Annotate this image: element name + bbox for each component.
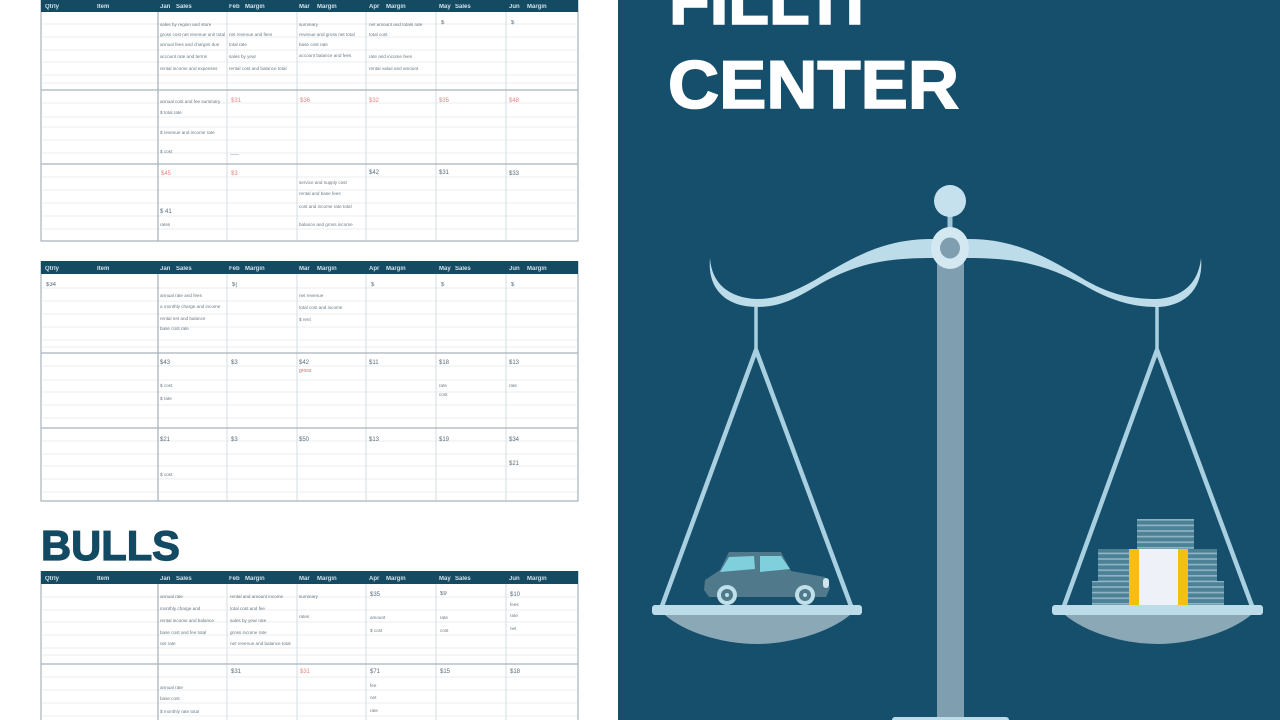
table cell text: annual rate xyxy=(160,594,183,599)
table: bottom sales grid xyxy=(41,571,578,720)
right pan xyxy=(1052,307,1263,644)
table cell text: rental net and balance xyxy=(160,316,206,321)
table cell text: $ total rate xyxy=(160,110,182,115)
table cell text: $31 xyxy=(439,170,450,176)
table header: May xyxy=(439,266,451,272)
table cell text: $36 xyxy=(300,98,311,104)
table cell text: total cost and income xyxy=(299,305,343,310)
table header: Sales xyxy=(455,4,471,10)
table cell text: monthly charge and xyxy=(160,606,201,611)
table cell text: sales by year xyxy=(229,54,257,59)
table cell text: total rate xyxy=(229,42,247,47)
table header: Qtrly xyxy=(45,4,60,10)
table cell text: $15 xyxy=(440,669,451,675)
table cell text: —— xyxy=(230,152,240,157)
table header: Margin xyxy=(527,4,547,10)
table cell text: $3 xyxy=(231,437,238,443)
table cell text: $35 xyxy=(439,98,450,104)
table cell text xyxy=(46,282,520,477)
table cell text: rental income and expenses xyxy=(160,66,218,71)
table cell text: net revenue and fees xyxy=(229,32,273,37)
table header: Margin xyxy=(527,576,547,582)
table cell text: $43 xyxy=(160,360,171,366)
table cell text: $ xyxy=(371,282,375,288)
table cell text: $| xyxy=(232,282,237,288)
table header: Margin xyxy=(386,576,406,582)
table cell text: net revenue and balance total xyxy=(230,641,291,646)
table cell text: rental value and amount xyxy=(369,66,419,71)
table header: Jan xyxy=(160,576,171,582)
table cell text: $13 xyxy=(369,437,380,443)
table cell text: $42 xyxy=(369,170,380,176)
table cell text: $35 xyxy=(370,592,381,598)
table cell text: gross xyxy=(299,368,312,374)
table header: Feb xyxy=(229,4,240,10)
table cell text: sales by region and store xyxy=(160,22,212,27)
table cell text: $ xyxy=(441,282,445,288)
table cell text: net rate xyxy=(160,641,176,646)
table cell text: rate xyxy=(509,383,517,388)
table header: Sales xyxy=(176,266,192,272)
table cell text: $ cost xyxy=(160,383,173,388)
table cell text: $34 xyxy=(46,282,57,288)
table header xyxy=(41,571,578,584)
scale pole xyxy=(937,262,964,720)
table cell text: $13 xyxy=(509,360,520,366)
table cell text: $ revenue and income rate xyxy=(160,130,215,135)
table cell text: $9 xyxy=(440,591,447,597)
table cell text: sales by year rate xyxy=(230,618,267,623)
table cell text: net revenue xyxy=(299,293,324,298)
table cell text: rate xyxy=(440,615,448,620)
table cell text: $ rate xyxy=(160,396,172,401)
table cell text: annual rate xyxy=(160,685,183,690)
table cell text xyxy=(160,20,520,227)
heading: BULLS: BULLS xyxy=(41,522,180,569)
table header: Feb xyxy=(229,576,240,582)
table cell text: annual fees and charges due xyxy=(160,42,220,47)
table cell text: $ 41 xyxy=(160,209,172,215)
table header: Sales xyxy=(176,4,192,10)
panel: scale background xyxy=(618,0,1280,720)
table header: Jun xyxy=(509,266,520,272)
icon: balance scale xyxy=(652,185,1263,720)
table cell text: $48 xyxy=(509,98,520,104)
table header: Qtrly xyxy=(45,266,60,272)
table cell text: total cost and fee xyxy=(230,606,265,611)
table cell text: total cost xyxy=(369,32,388,37)
table cell text: rental and amount income xyxy=(230,594,284,599)
table cell text: service and supply cost xyxy=(299,180,347,185)
table cell text: $31 xyxy=(231,98,242,104)
table header: May xyxy=(439,4,451,10)
table cell text: $32 xyxy=(369,98,380,104)
table cell text: $45 xyxy=(161,171,172,177)
table cell text: $ xyxy=(441,20,445,26)
table cell text: $19 xyxy=(439,437,450,443)
table header: Apr xyxy=(369,4,380,10)
icon: car xyxy=(704,552,830,605)
table cell text: $ rent xyxy=(299,317,311,322)
table cell text: $ cost xyxy=(160,472,173,477)
table header: Item xyxy=(97,4,109,10)
table cell text: cost and income rate total xyxy=(299,204,352,209)
table header: Margin xyxy=(527,266,547,272)
table header: Jun xyxy=(509,4,520,10)
title xyxy=(668,0,959,123)
table cell text: annual rate and fees xyxy=(160,293,203,298)
table cell text: account balance and fees xyxy=(299,53,352,58)
table header: Margin xyxy=(317,4,337,10)
table cell text: $50 xyxy=(299,437,310,443)
table cell text: $21 xyxy=(509,461,520,467)
table header: Margin xyxy=(245,4,265,10)
table header: Sales xyxy=(176,576,192,582)
table cell text: base cost and fee total xyxy=(160,630,206,635)
table cell text: fees xyxy=(510,602,519,607)
left pan xyxy=(652,307,862,644)
table cell text: account rate and terms xyxy=(160,54,208,59)
table cell text: rental income and balance xyxy=(160,618,214,623)
table header xyxy=(41,261,578,274)
table cell text: base cost rate xyxy=(299,42,328,47)
table cell text: $18 xyxy=(510,669,521,675)
table header: Feb xyxy=(229,266,240,272)
table cell text: gross cost net revenue unit total xyxy=(160,32,225,37)
table cell text: cost xyxy=(440,628,449,633)
table cell text: $3 xyxy=(231,360,238,366)
table header: Mar xyxy=(299,576,310,582)
table cell text: $ xyxy=(511,282,515,288)
table header: Item xyxy=(97,576,109,582)
table cell text: $31 xyxy=(300,669,311,675)
table cell text: amount xyxy=(370,615,386,620)
table cell text: $34 xyxy=(509,437,520,443)
icon: cash stacks xyxy=(1092,519,1224,605)
table cell text: $ monthly rate total xyxy=(160,709,199,714)
table cell text: net xyxy=(370,695,377,700)
scale beam xyxy=(710,239,1201,307)
table cell text: $21 xyxy=(160,437,171,443)
table header: Jan xyxy=(160,266,171,272)
table cell text: $33 xyxy=(509,171,520,177)
table cell text: $10 xyxy=(510,592,521,598)
scale top finial xyxy=(934,185,966,230)
table header: Jun xyxy=(509,576,520,582)
table cell text: net amount and totals rate xyxy=(369,22,423,27)
table cell text: a monthly charge and income xyxy=(160,304,221,309)
table header: Margin xyxy=(245,576,265,582)
scale base xyxy=(892,717,1009,720)
table header: Apr xyxy=(369,576,380,582)
table cell text: gross income rate xyxy=(230,630,267,635)
table cell text: $ cost xyxy=(370,628,383,633)
table cell text: $11 xyxy=(369,360,379,366)
table cell text: fee xyxy=(370,683,377,688)
table header: Margin xyxy=(317,576,337,582)
table header: Item xyxy=(97,266,109,272)
table cell text: $18 xyxy=(439,360,450,366)
table cell text: $ xyxy=(511,20,515,26)
table header: Mar xyxy=(299,266,310,272)
table header: Mar xyxy=(299,4,310,10)
table cell text: rental and base fees xyxy=(299,191,341,196)
table cell text: summary xyxy=(299,22,319,27)
table cell text: base cost xyxy=(160,696,180,701)
table cell text: revenue and gross net total xyxy=(299,32,355,37)
table cell text: $ cost xyxy=(160,149,173,154)
table header: Margin xyxy=(386,266,406,272)
table cell text: rate xyxy=(510,613,518,618)
table header: Sales xyxy=(455,576,471,582)
table cell text xyxy=(160,591,521,714)
table header xyxy=(41,0,578,12)
table cell text: $71 xyxy=(370,669,381,675)
table cell text: cost xyxy=(439,392,448,397)
table cell text: rate xyxy=(370,708,378,713)
table header: Jan xyxy=(160,4,171,10)
table cell text: rate and income fees xyxy=(369,54,413,59)
table cell text: $3 xyxy=(231,171,238,177)
scale pivot xyxy=(931,227,969,269)
table cell text: rental cost and balance total xyxy=(229,66,286,71)
table header: Margin xyxy=(245,266,265,272)
title: CENTER xyxy=(668,47,959,123)
table cell text: rates xyxy=(160,222,171,227)
table header: Margin xyxy=(317,266,337,272)
table cell text: rates xyxy=(299,614,310,619)
table header: Qtrly xyxy=(45,576,60,582)
table cell text: annual cost and fee summary xyxy=(160,99,221,104)
table cell text: summary xyxy=(299,594,319,599)
table cell text: base cost rate xyxy=(160,326,189,331)
table header: Apr xyxy=(369,266,380,272)
table cell text: balance and gross income xyxy=(299,222,353,227)
table header: Margin xyxy=(386,4,406,10)
table: top sales grid xyxy=(41,0,578,241)
table cell text: net xyxy=(510,626,517,631)
table: middle sales grid xyxy=(41,261,578,501)
table cell text: rate xyxy=(439,383,447,388)
table cell text: $31 xyxy=(231,669,242,675)
table header: May xyxy=(439,576,451,582)
table header: Sales xyxy=(455,266,471,272)
table cell text: $42 xyxy=(299,360,310,366)
